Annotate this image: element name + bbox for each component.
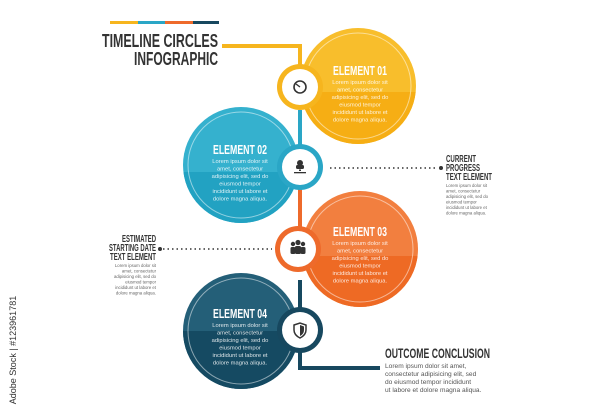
panel: element 04: ELEMENT 04	[213, 306, 268, 321]
panel: element 03: ELEMENT 03	[333, 224, 387, 239]
panel: element 02	[183, 107, 296, 223]
callout: estimated starting date: amet, consectetur	[122, 268, 157, 274]
callout: estimated starting date: eiusmod tempor	[125, 280, 157, 284]
panel: element 04	[183, 273, 295, 389]
icon: group node	[275, 226, 321, 272]
panel: element 02: eiusmod tempor	[219, 182, 261, 188]
panel: element 03: adipisicing elit, sed do	[332, 256, 388, 262]
panel: element 01: adipisicing elit, sed do	[332, 95, 388, 101]
panel: element 03: dolore magna aliqua.	[333, 278, 387, 284]
callout: outcome conclusion: Lorem ipsum dolor sit amet,	[385, 363, 467, 370]
callout: current progress: incididunt ut labore et	[446, 205, 488, 210]
callout: outcome conclusion: ut labore et dolore magna aliqua.	[385, 387, 482, 394]
panel: element 01: Lorem ipsum dolor sit	[332, 80, 388, 86]
callout: current progress: CURRENT	[446, 154, 476, 165]
title color bar	[110, 21, 219, 24]
panel: element 02: ELEMENT 02	[213, 142, 267, 157]
panel: element 02: adipisicing elit, sed do	[212, 174, 268, 180]
title	[102, 31, 218, 69]
callout: estimated starting date: dolore magna aliqua.	[116, 290, 156, 296]
panel: element 04: dolore magna aliqua.	[213, 360, 267, 366]
callout: estimated starting date: incididunt ut labore et	[115, 285, 157, 290]
panel: element 04: adipisicing elit, sed do	[212, 338, 268, 344]
panel: element 02: Lorem ipsum dolor sit	[212, 159, 268, 165]
callout: current progress: amet, consectetur	[446, 188, 481, 194]
icon: clock node	[277, 64, 323, 110]
panel: element 01: incididunt ut labore et	[332, 110, 388, 116]
title: INFOGRAPHIC	[134, 49, 218, 69]
callout: estimated starting date: STARTING DATE	[109, 243, 156, 254]
watermark text: Adobe Stock | #123961781	[8, 296, 18, 404]
callout: estimated starting date: TEXT ELEMENT	[110, 252, 156, 263]
panel: element 04: incididunt ut labore et	[212, 353, 268, 359]
connector lines	[222, 46, 380, 368]
panel: element 02: incididunt ut labore et	[212, 189, 268, 195]
panel: element 04: Lorem ipsum dolor sit	[212, 323, 268, 329]
panel: element 03: incididunt ut labore et	[332, 271, 388, 277]
callout: current progress: PROGRESS	[446, 163, 480, 174]
callout: estimated starting date	[109, 234, 272, 296]
panel: element 01: eiusmod tempor	[339, 102, 381, 108]
title: TIMELINE CIRCLES	[102, 31, 218, 51]
panel: element 01: amet, consectetur	[337, 88, 383, 94]
callout: current progress: dolore magna aliqua.	[446, 210, 486, 216]
callout: estimated starting date: adipisicing elit, sed do	[114, 274, 157, 279]
callout: current progress: Lorem ipsum dolor sit	[446, 183, 488, 188]
icon: person at desk node	[277, 144, 323, 190]
icon: shield node	[277, 307, 323, 353]
panel: element 03: eiusmod tempor	[339, 264, 381, 270]
callout: outcome conclusion	[385, 345, 490, 394]
callout: current progress: TEXT ELEMENT	[446, 172, 492, 183]
panel: element 03	[306, 191, 418, 307]
callout: current progress	[330, 154, 492, 216]
panel: element 04: amet, consectetur	[217, 330, 263, 336]
callout: estimated starting date: Lorem ipsum dolor sit	[115, 263, 157, 268]
panel: element 02: dolore magna aliqua.	[213, 196, 267, 202]
panel: element 03: Lorem ipsum dolor sit	[332, 241, 388, 247]
callout: outcome conclusion: OUTCOME CONCLUSION	[385, 345, 490, 361]
callout: outcome conclusion: consectetur adipisicing elit, sed	[385, 371, 477, 378]
callout: estimated starting date: ESTIMATED	[122, 234, 156, 245]
panel: element 01: dolore magna aliqua.	[333, 118, 387, 124]
panel: element 02: amet, consectetur	[217, 166, 263, 172]
callout: current progress: adipisicing elit, sed do	[446, 194, 489, 199]
callout: current progress: eiusmod tempor	[446, 200, 477, 204]
panel: element 01: ELEMENT 01	[333, 63, 387, 78]
panel: element 04: eiusmod tempor	[219, 346, 261, 352]
panel: element 01	[304, 28, 416, 144]
panel: element 03: amet, consectetur	[337, 248, 383, 254]
callout: outcome conclusion: do eiusmod tempor incididunt	[385, 379, 471, 386]
